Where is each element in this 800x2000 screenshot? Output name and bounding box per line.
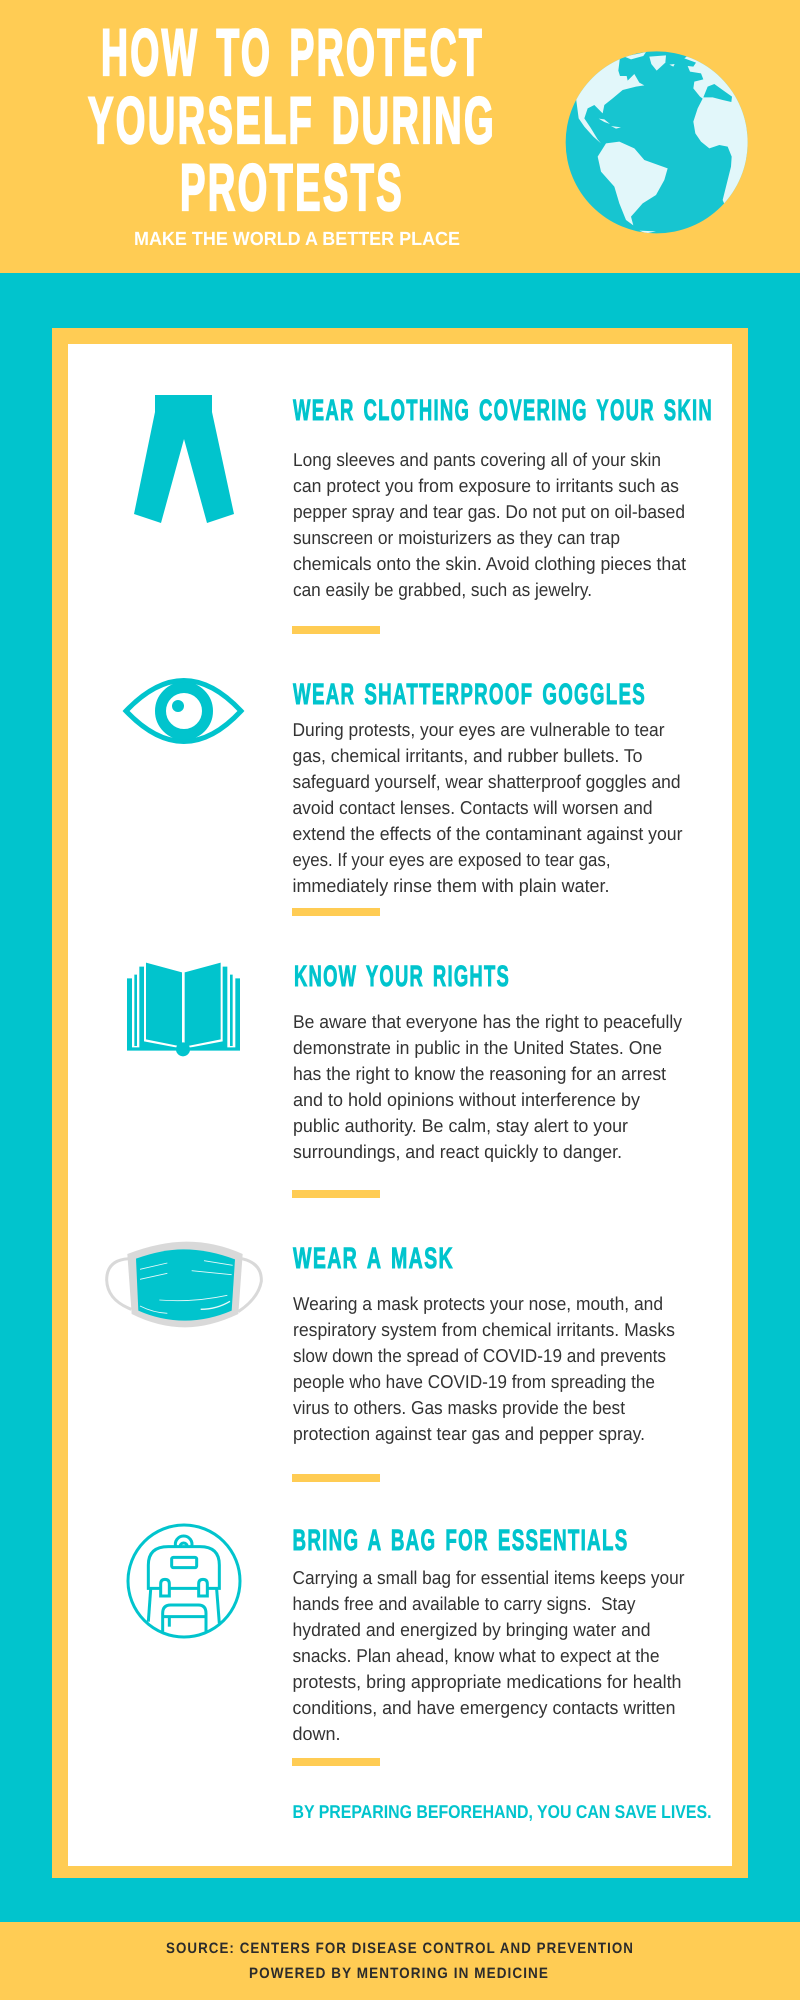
- body text: bag: hydrated and energized by bringing water and: [292, 1619, 650, 1640]
- title: PROTESTS: [180, 150, 404, 224]
- header band: [0, 0, 800, 273]
- title: [88, 15, 496, 224]
- subtitle: MAKE THE WORLD A BETTER PLACE: [134, 229, 460, 250]
- body text: clothing: Long sleeves and pants covering all of your skin: [293, 449, 661, 470]
- body text: mask: [293, 1293, 675, 1444]
- body text: rights: has the right to know the reasoning for an arrest: [293, 1063, 667, 1084]
- footer band: [0, 1922, 800, 2000]
- body text: goggles: immediately rinse them with plain water.: [292, 875, 610, 896]
- body text: rights: and to hold opinions without interference by: [293, 1089, 641, 1110]
- body text: mask: people who have COVID-19 from spreading the: [293, 1371, 655, 1392]
- body text: bag: [292, 1567, 684, 1744]
- body text: clothing: sunscreen or moisturizers as they can trap: [293, 527, 620, 548]
- section: rights: [127, 960, 683, 1198]
- body text: clothing: [293, 449, 687, 600]
- body text: rights: [293, 1011, 683, 1162]
- body text: mask: virus to others. Gas masks provide the best: [293, 1397, 626, 1418]
- heading: mask: WEAR A MASK: [293, 1242, 454, 1275]
- body text: mask: protection against tear gas and pepper spray.: [293, 1423, 645, 1444]
- body text: bag: hands free and available to carry signs. Stay: [292, 1593, 636, 1614]
- body text: bag: down.: [292, 1723, 340, 1744]
- icon: pants: [134, 395, 234, 523]
- icon: globe: [566, 47, 763, 233]
- body text: rights: demonstrate in public in the United States. One: [293, 1037, 662, 1058]
- body text: bag: conditions, and have emergency contacts written: [292, 1697, 676, 1718]
- closing callout: BY PREPARING BEFOREHAND, YOU CAN SAVE LIVES.: [292, 1801, 712, 1822]
- body text: mask: Wearing a mask protects your nose, mouth, and: [293, 1293, 663, 1314]
- section: bag: [128, 1524, 684, 1766]
- body text: mask: slow down the spread of COVID-19 and prevents: [293, 1345, 666, 1366]
- body text: goggles: avoid contact lenses. Contacts will worsen and: [292, 797, 652, 818]
- body text: clothing: pepper spray and tear gas. Do not put on oil-based: [293, 501, 685, 522]
- body text: bag: Carrying a small bag for essential items keeps your: [292, 1567, 684, 1588]
- icon: eye: [126, 680, 241, 742]
- section: goggles: [126, 678, 682, 916]
- title: HOW TO PROTECT: [101, 15, 484, 89]
- body text: bag: protests, bring appropriate medications for health: [292, 1671, 682, 1692]
- body text: rights: surroundings, and react quickly to danger.: [293, 1141, 622, 1162]
- body text: bag: snacks. Plan ahead, know what to expect at the: [292, 1645, 660, 1666]
- source credit: SOURCE: CENTERS FOR DISEASE CONTROL AND PREVENTION: [166, 1940, 634, 1957]
- body text: goggles: extend the effects of the contaminant against your: [292, 823, 682, 844]
- icon: face mask: [107, 1242, 261, 1327]
- body text: mask: respiratory system from chemical irritants. Masks: [293, 1319, 675, 1340]
- body text: goggles: eyes. If your eyes are exposed to tear gas,: [292, 849, 610, 870]
- body text: clothing: can easily be grabbed, such as jewelry.: [293, 579, 592, 600]
- panel: yellow frame with white content card: [52, 328, 748, 1878]
- powered-by credit: POWERED BY MENTORING IN MEDICINE: [249, 1965, 549, 1982]
- body text: goggles: [292, 719, 682, 896]
- body text: clothing: chemicals onto the skin. Avoid clothing pieces that: [293, 553, 687, 574]
- icon: backpack in circle: [128, 1525, 240, 1637]
- title: YOURSELF DURING: [88, 83, 496, 157]
- body text: clothing: can protect you from exposure to irritants such as: [293, 475, 679, 496]
- body text: goggles: gas, chemical irritants, and rubber bullets. To: [292, 745, 642, 766]
- body text: rights: Be aware that everyone has the right to peacefully: [293, 1011, 683, 1032]
- body text: rights: public authority. Be calm, stay alert to your: [293, 1115, 628, 1136]
- section: mask: [107, 1242, 675, 1482]
- body text: goggles: safeguard yourself, wear shatterproof goggles and: [292, 771, 680, 792]
- heading: rights: KNOW YOUR RIGHTS: [294, 960, 510, 993]
- icon: book: [127, 963, 240, 1056]
- section: clothing: [134, 394, 713, 634]
- body text: goggles: During protests, your eyes are vulnerable to tear: [292, 719, 664, 740]
